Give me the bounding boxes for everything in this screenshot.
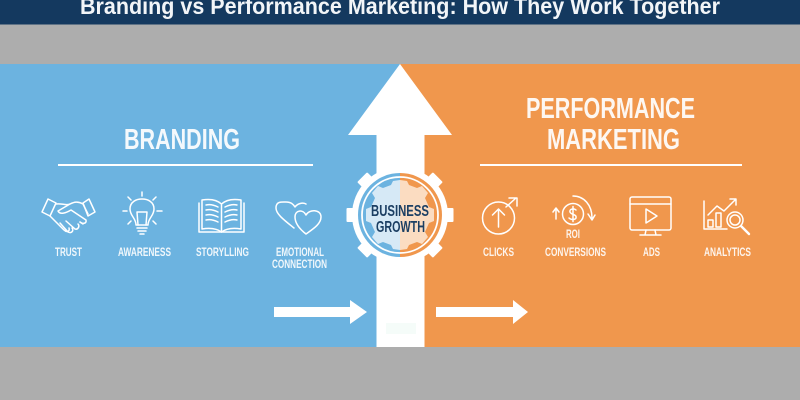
icon: clicks (482, 198, 517, 234)
thin white ring (362, 177, 438, 253)
label: ads: ADS (643, 247, 660, 259)
label: emotional connection (272, 247, 327, 271)
icon: roi (553, 196, 595, 224)
label: emotional connection: CONNECTION (272, 259, 327, 271)
heading: performance marketing: MARKETING (547, 124, 680, 156)
label: emotional connection: EMOTIONAL (276, 247, 324, 259)
icon: ads screen (630, 197, 671, 235)
icon: analytics (704, 199, 749, 234)
arrow: branding flow (274, 300, 367, 324)
label: awareness: AWARENESS (118, 247, 171, 259)
label: clicks: CLICKS (483, 247, 514, 259)
label: roi conversions (545, 229, 606, 259)
arrow: central growth arrow (348, 64, 452, 347)
divider left (58, 164, 313, 166)
divider right (480, 164, 742, 166)
label: storytelling: STORYLLING (196, 247, 249, 259)
heading: performance marketing (526, 93, 695, 156)
icon: handshake (42, 199, 95, 233)
panel: performance marketing (400, 64, 800, 347)
ring halves (358, 173, 400, 257)
label: trust: TRUST (55, 247, 82, 259)
label: roi conversions: CONVERSIONS (545, 247, 606, 259)
icon: light bulb (123, 192, 162, 234)
icon: two hearts (276, 202, 321, 234)
inner gear left (366, 180, 400, 250)
icon: open book (199, 199, 244, 232)
label: analytics: ANALYTICS (704, 247, 751, 259)
panel: branding (0, 64, 400, 347)
heading: performance marketing: PERFORMANCE (526, 93, 695, 125)
gear label (371, 203, 429, 236)
inner gear right (400, 180, 434, 250)
icon: business growth gear (346, 162, 454, 268)
faint mark on arrow shaft (386, 323, 416, 334)
label: roi conversions: ROI (566, 229, 580, 241)
gear label: GROWTH (376, 219, 425, 236)
gear label: BUSINESS (371, 203, 429, 220)
heading: branding: BRANDING (124, 124, 240, 156)
header band (0, 0, 800, 24)
gear outer teeth (346, 162, 454, 268)
arrow: performance flow (436, 300, 528, 324)
